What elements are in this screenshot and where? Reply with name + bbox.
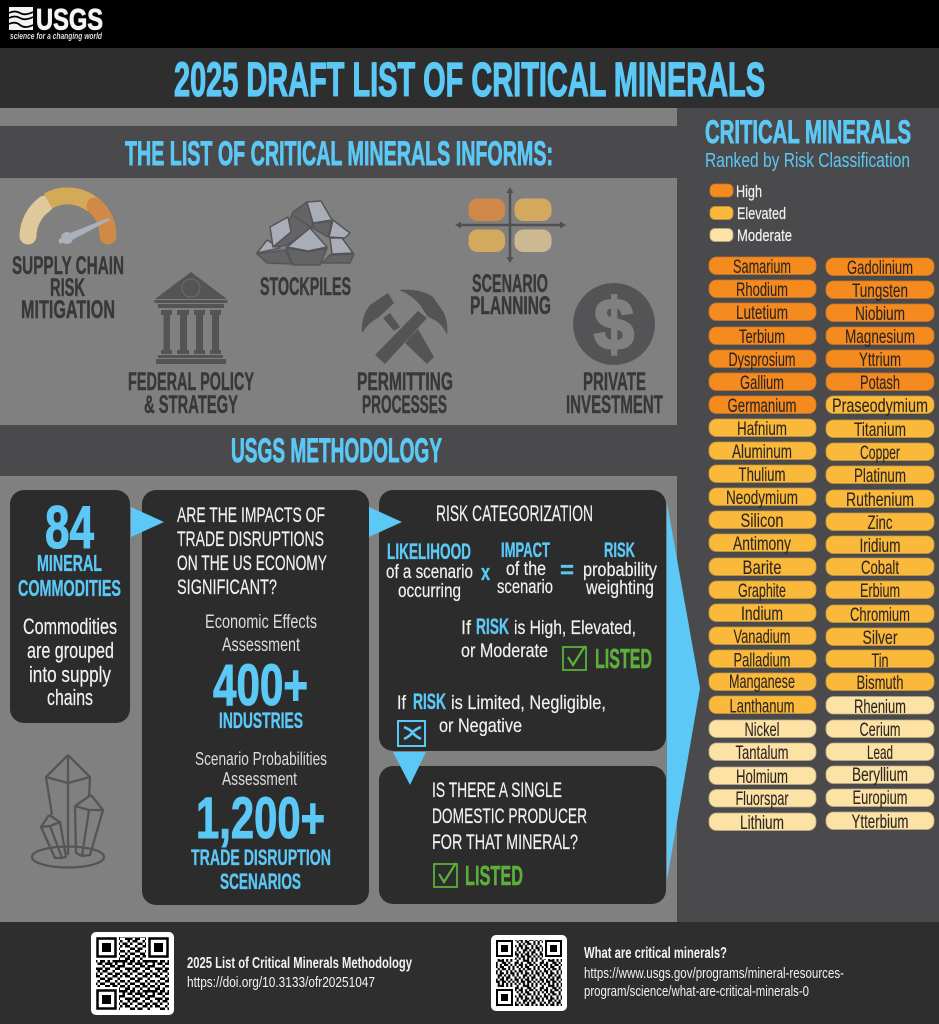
stat: scenarios: TRADE DISRUPTION [191,845,331,870]
mineral list: column 2: Tin [872,650,888,672]
label: permitting processes: PROCESSES [362,391,447,419]
text: methodology link: 2025 List of Critical Minerals Methodology [187,955,412,972]
box: risk categorization: RISK CATEGORIZATION [436,501,593,526]
USGS logo: science for a changing world [10,31,102,42]
text: critical minerals link: program/science/what-are-critical-minerals-0 [584,984,809,1000]
arrow: to critical minerals list [667,503,700,880]
stat: industries: Assessment [222,635,301,656]
not listed condition: or Negative [439,715,522,737]
mineral list: column 2: Tungsten [852,280,908,302]
mineral list: column 1: Antimony [733,533,791,555]
box: mineral commodities: are grouped [27,638,114,663]
stat: scenarios: Assessment [222,769,297,789]
stat: scenarios: 1,200+ [196,786,325,851]
mineral list: column 1: Vanadium [734,626,790,648]
mineral list: column 1: Palladium [734,650,790,672]
mineral list: column 2: Ruthenium [846,489,914,511]
mineral list: column 2: Potash [860,372,900,394]
box: mineral commodities: 84 [45,494,94,561]
box: mineral commodities [10,490,130,723]
mineral list: column 1: Lithium [740,812,784,834]
label: private investment: PRIVATE [583,368,646,396]
icon: gauge [28,196,110,244]
stat: scenarios: SCENARIOS [220,869,301,894]
listed condition: or Moderate [461,640,548,662]
question: ARE THE IMPACTS OF [177,503,325,527]
mineral list: column 1: Lanthanum [730,696,794,718]
text: critical minerals link: What are critical minerals? [584,945,727,962]
mineral list: column 1: Silicon [740,510,784,532]
stat: scenarios: Scenario Probabilities [195,749,327,769]
mineral list: column 1: Rhodium [736,279,788,301]
mineral list: column 2: Copper [860,442,900,464]
label: supply chain risk mitigation [12,252,124,324]
box: mineral commodities: MINERAL [37,550,102,576]
mineral list: column 2: Erbium [860,580,900,602]
mineral list: column 1: Fluorspar [736,788,789,810]
label: private investment [566,368,663,419]
label: stockpiles: STOCKPILES [260,273,351,301]
mineral list: column 1: Manganese [729,671,795,693]
arrow: down to producer question [393,752,426,785]
listed condition: LISTED [595,643,652,674]
formula: probability [583,560,657,581]
mineral list: column 1: Neodymium [726,487,798,509]
icon: federal building [154,272,228,364]
mineral list: column 1: Terbium [739,326,785,348]
USGS logo: USGS [36,4,103,36]
mineral list: column 2: Beryllium [852,764,908,786]
legend: Moderate [737,226,792,245]
USGS logo [9,4,103,42]
formula: of the [506,559,546,580]
formula: weighting [585,578,654,599]
label: federal policy: FEDERAL POLICY [128,368,254,396]
listed condition: is High, Elevated, [514,617,636,639]
formula: x [481,560,491,585]
mineral list: column 1: Graphite [738,580,786,602]
label: supply chain risk mitigation: MITIGATION [21,296,115,324]
box: mineral commodities: COMMODITIES [18,575,121,601]
mineral list: column 1: Lutetium [736,302,788,324]
heading: the list informs: THE LIST OF CRITICAL MINERALS INFORMS: [125,135,553,173]
mineral list: column 1: Barite [742,557,782,579]
mineral list: column 2 [826,257,934,833]
panel: critical minerals list [677,108,939,922]
mineral list: column 1: Holmium [736,766,788,788]
formula [386,539,657,602]
icon: crystals [32,755,104,868]
formula: scenario [497,577,553,598]
mineral list: column 1: Samarium [733,256,791,278]
header bar [0,0,939,48]
heading: critical minerals [705,114,911,172]
icon: dollar coin: $ [594,285,634,365]
heading: USGS methodology [0,425,677,476]
mineral list: column 2: Yttrium [859,349,901,371]
box: mineral commodities: Commodities [23,614,117,639]
label: federal policy: & STRATEGY [144,391,238,419]
mineral list: column 1: Indium [741,603,783,625]
question: TRADE DISRUPTIONS [177,527,324,551]
stat: industries: Economic Effects [205,612,317,633]
mineral list: column 2: Rhenium [854,696,906,718]
formula: of a scenario [386,562,473,583]
legend: High [736,182,762,201]
icon: stockpile rocks [257,201,354,265]
stat: industries [205,612,317,733]
mineral list: column 2: Chromium [850,604,910,626]
not listed condition: is Limited, Negligible, [451,692,606,714]
panel: uses of the list [0,178,677,425]
heading: USGS methodology: USGS METHODOLOGY [231,432,442,470]
text: methodology link [187,955,412,991]
mineral list: column 1: Aluminum [732,441,792,463]
not listed condition: If [397,692,406,714]
mineral list: column 1: Thulium [738,464,786,486]
arrow: to risk categorization [369,507,402,537]
stat: industries: 400+ [213,653,308,718]
listed condition: RISK [476,614,509,639]
mineral list: column 1: Tantalum [736,742,788,764]
text: methodology link: https://doi.org/10.3133/ofr20251047 [187,975,375,991]
mineral list: column 2: Cobalt [861,557,899,579]
label: scenario planning: PLANNING [470,292,551,320]
box: single domestic producer: IS THERE A SINGLE [432,778,562,802]
text: critical minerals link [584,945,844,1000]
box: single domestic producer: FOR THAT MINERAL? [432,830,578,854]
box: trade disruption impacts [142,490,369,905]
mineral list: column 1 [709,256,816,834]
legend [710,182,792,245]
mineral list: column 1: Dysprosium [728,349,796,371]
not listed condition: RISK [413,689,446,714]
question [177,503,327,599]
QR code: methodology [91,932,174,1015]
mineral list: column 2: Titanium [854,419,906,441]
icon: scenario matrix [455,187,566,263]
box: single domestic producer [379,766,666,904]
formula: = [560,557,574,584]
mineral list: column 1: Germanium [728,395,796,417]
stat: scenarios [191,749,331,894]
label: supply chain risk mitigation: SUPPLY CHAIN [12,252,124,280]
mineral list: column 2: Iridium [860,535,900,557]
formula: IMPACT [501,539,550,562]
label: private investment: INVESTMENT [566,391,663,419]
heading: the list informs [0,126,677,178]
legend: Elevated [737,204,786,223]
label: scenario planning: SCENARIO [472,270,548,298]
not listed condition [397,689,606,746]
formula: occurring [398,581,461,602]
listed condition [461,614,652,674]
box: mineral commodities: chains [47,685,93,710]
mineral list: column 2: Platinum [854,465,906,487]
box: single domestic producer: DOMESTIC PRODUCER [432,804,587,828]
label: permitting processes [357,368,453,419]
icon: crossed pickaxes [362,290,447,364]
mineral list: column 2: Zinc [868,512,893,534]
formula: RISK [604,539,635,562]
text: critical minerals link: https://www.usgs.gov/programs/mineral-resources- [584,966,844,982]
box: mineral commodities: into supply [29,662,111,687]
label: permitting processes: PERMITTING [357,368,453,396]
stat: industries: INDUSTRIES [219,708,303,733]
mineral list: column 1: Nickel [744,719,780,741]
mineral list: column 2: Europium [852,787,908,809]
mineral list: column 2: Cerium [860,719,900,741]
listed condition: If [461,617,472,639]
question: SIGNIFICANT? [177,575,277,599]
label: supply chain risk mitigation: RISK [50,274,85,302]
mineral list: column 2: Niobium [855,303,905,325]
label: scenario planning [470,270,551,320]
mineral list: column 1: Hafnium [737,418,787,440]
box: risk categorization [379,490,666,751]
label: federal policy [128,368,254,419]
icon: dollar coin [573,283,655,365]
mineral list: column 2: Bismuth [856,672,904,694]
mineral list: column 2: Ytterbium [852,811,908,833]
mineral list: column 2: Lead [867,742,893,764]
formula: LIKELIHOOD [387,539,471,564]
QR code: what are critical minerals [491,935,567,1011]
arrow: to trade disruption question [131,507,164,537]
mineral list: column 2: Silver [862,627,898,649]
footer [0,922,939,1024]
box: single domestic producer: LISTED [465,860,523,891]
mineral list: column 1: Gallium [740,372,784,394]
question: ON THE US ECONOMY [177,551,327,575]
